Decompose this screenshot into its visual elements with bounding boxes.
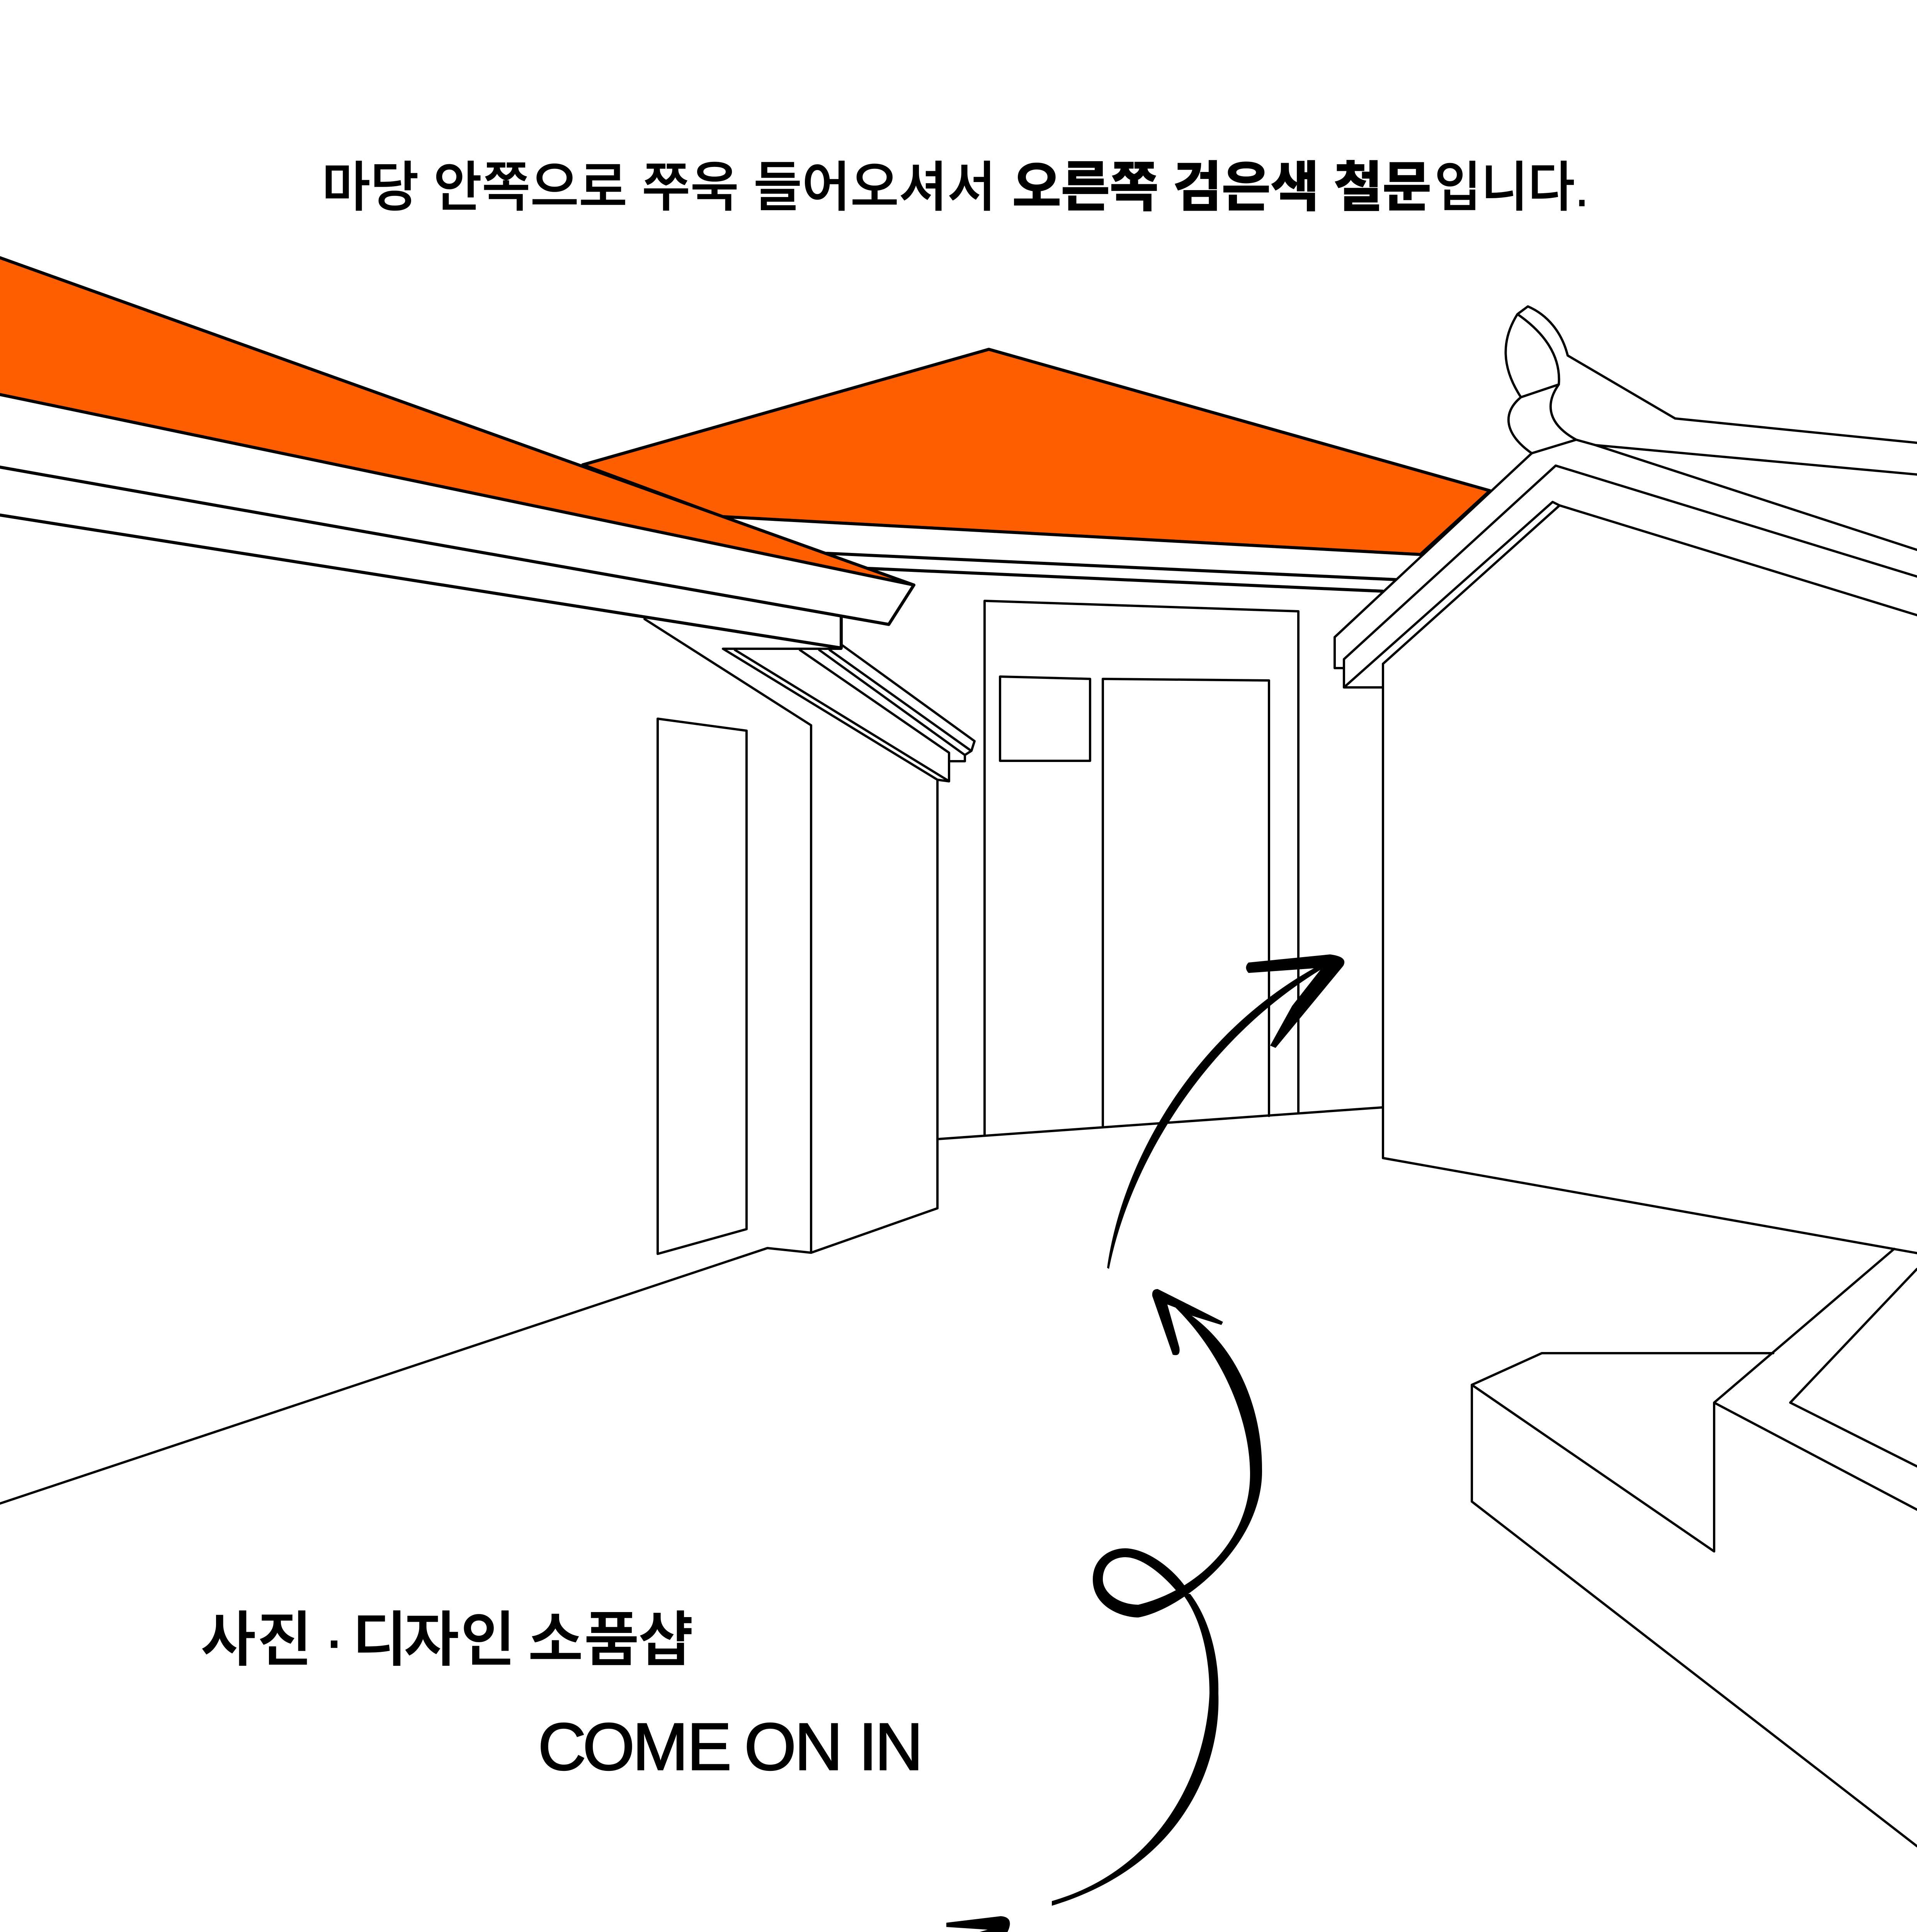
left window bbox=[658, 719, 747, 1254]
arrow 2 head and shaft bbox=[1138, 1289, 1262, 1617]
right building wall bbox=[1383, 664, 1917, 1253]
arrow 2 tail bbox=[1052, 1594, 1218, 1906]
back gate frame bbox=[985, 601, 1298, 1136]
arrow 3: curved arrow bbox=[901, 1916, 1209, 1932]
arrow 2: looping arrow bbox=[1052, 1289, 1262, 1906]
back floor line bbox=[937, 1107, 1382, 1139]
top caption: 오른쪽 검은색 철문 bbox=[1012, 157, 1431, 218]
top caption: 입니다. bbox=[1434, 157, 1589, 218]
top caption: 마당 안쪽으로 쭈욱 들어오셔서 bbox=[322, 157, 996, 218]
left side gable eave bbox=[723, 645, 975, 781]
subtitle: 사진·디자인 소품샵: 사진 · 디자인 소품샵 bbox=[201, 1607, 693, 1673]
center eaves bbox=[827, 553, 1396, 591]
arrow 2 loop bbox=[1093, 1548, 1187, 1617]
left orange roof bbox=[0, 258, 914, 585]
top caption bbox=[322, 157, 1589, 218]
arrow 1: top arrow to the door bbox=[1107, 954, 1344, 1269]
center orange roof bbox=[583, 349, 1490, 554]
black iron door bbox=[1103, 679, 1269, 1127]
right roof gable bbox=[1335, 440, 1917, 687]
courtyard steps bbox=[1472, 1249, 1917, 1846]
small square window bbox=[1000, 677, 1090, 761]
subtitle: COME ON IN: COME ON IN bbox=[538, 1709, 923, 1784]
left building side wall bbox=[0, 619, 937, 1503]
left roof fascia bbox=[0, 467, 914, 648]
roof ridge ornament bbox=[1506, 306, 1917, 453]
